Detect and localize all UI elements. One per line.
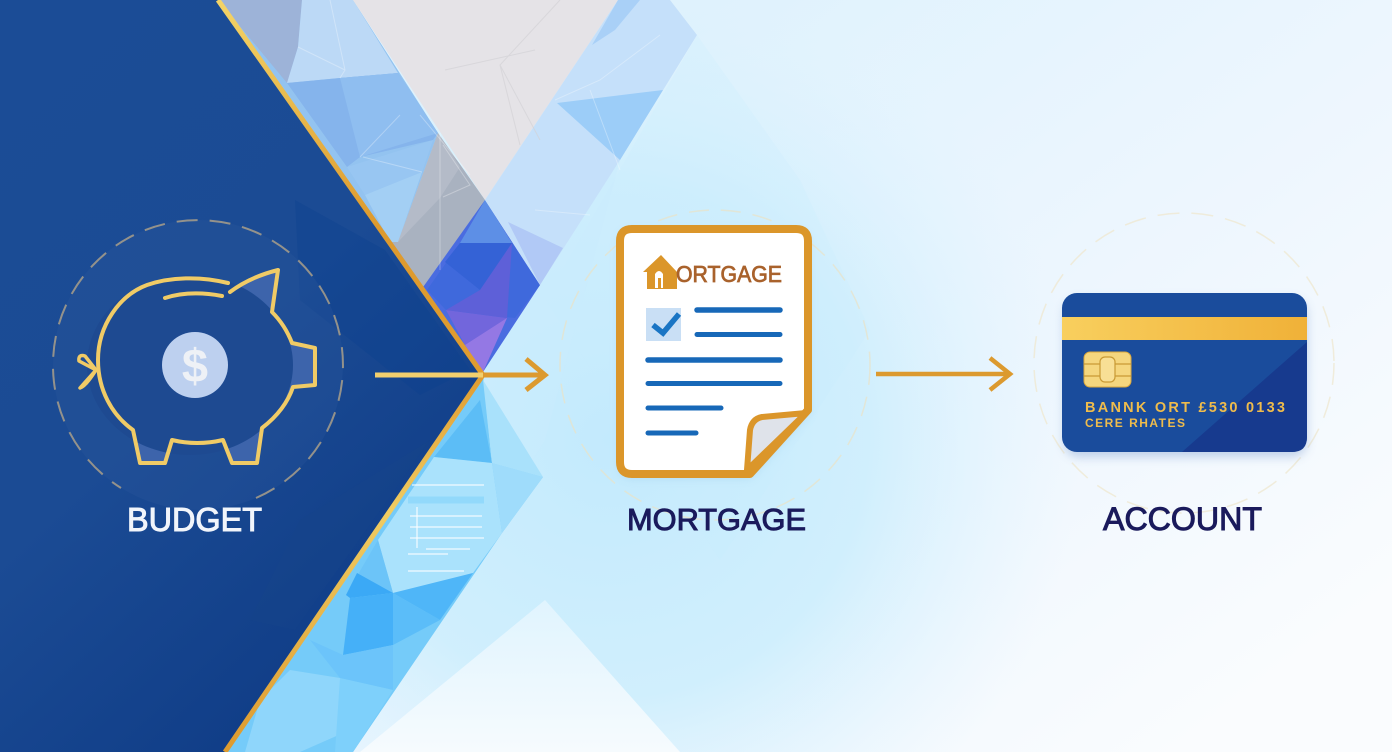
- icon: piggy bank: [79, 270, 315, 463]
- bottom pale triangle: [360, 600, 680, 752]
- dashed ring: account: [1034, 213, 1334, 513]
- icon: dollar coin: [162, 332, 228, 398]
- gold chevron edge: [218, 0, 483, 752]
- label: mortgage: MORTGAGE: [627, 502, 806, 537]
- icon: dollar coin: $: [182, 339, 208, 392]
- dashed ring: mortgage: [560, 210, 870, 520]
- label: budget: BUDGET: [127, 501, 262, 538]
- card chip: [1084, 352, 1131, 387]
- label: account: ACCOUNT: [1103, 501, 1262, 537]
- card number: BANNK ORT £530 0133: [1085, 400, 1285, 416]
- arrow: budget to mortgage: [375, 359, 545, 390]
- folded corner: [747, 413, 806, 470]
- panel: geometric facets bottom: [225, 375, 543, 752]
- text lines: [648, 310, 780, 433]
- icon: bank card: [1062, 293, 1307, 457]
- document title: ORTGAGE: [676, 261, 782, 287]
- dashed ring: budget: [53, 220, 343, 498]
- card caption: CERE RHATES: [1085, 416, 1185, 430]
- icon: house: [643, 255, 677, 289]
- icon: mortgage document: [620, 229, 808, 477]
- checkbox: [646, 308, 681, 341]
- panel: budget dark blue: [0, 0, 483, 752]
- panel: geometric facets top: [218, 0, 697, 372]
- arrow: mortgage to account: [876, 358, 1010, 390]
